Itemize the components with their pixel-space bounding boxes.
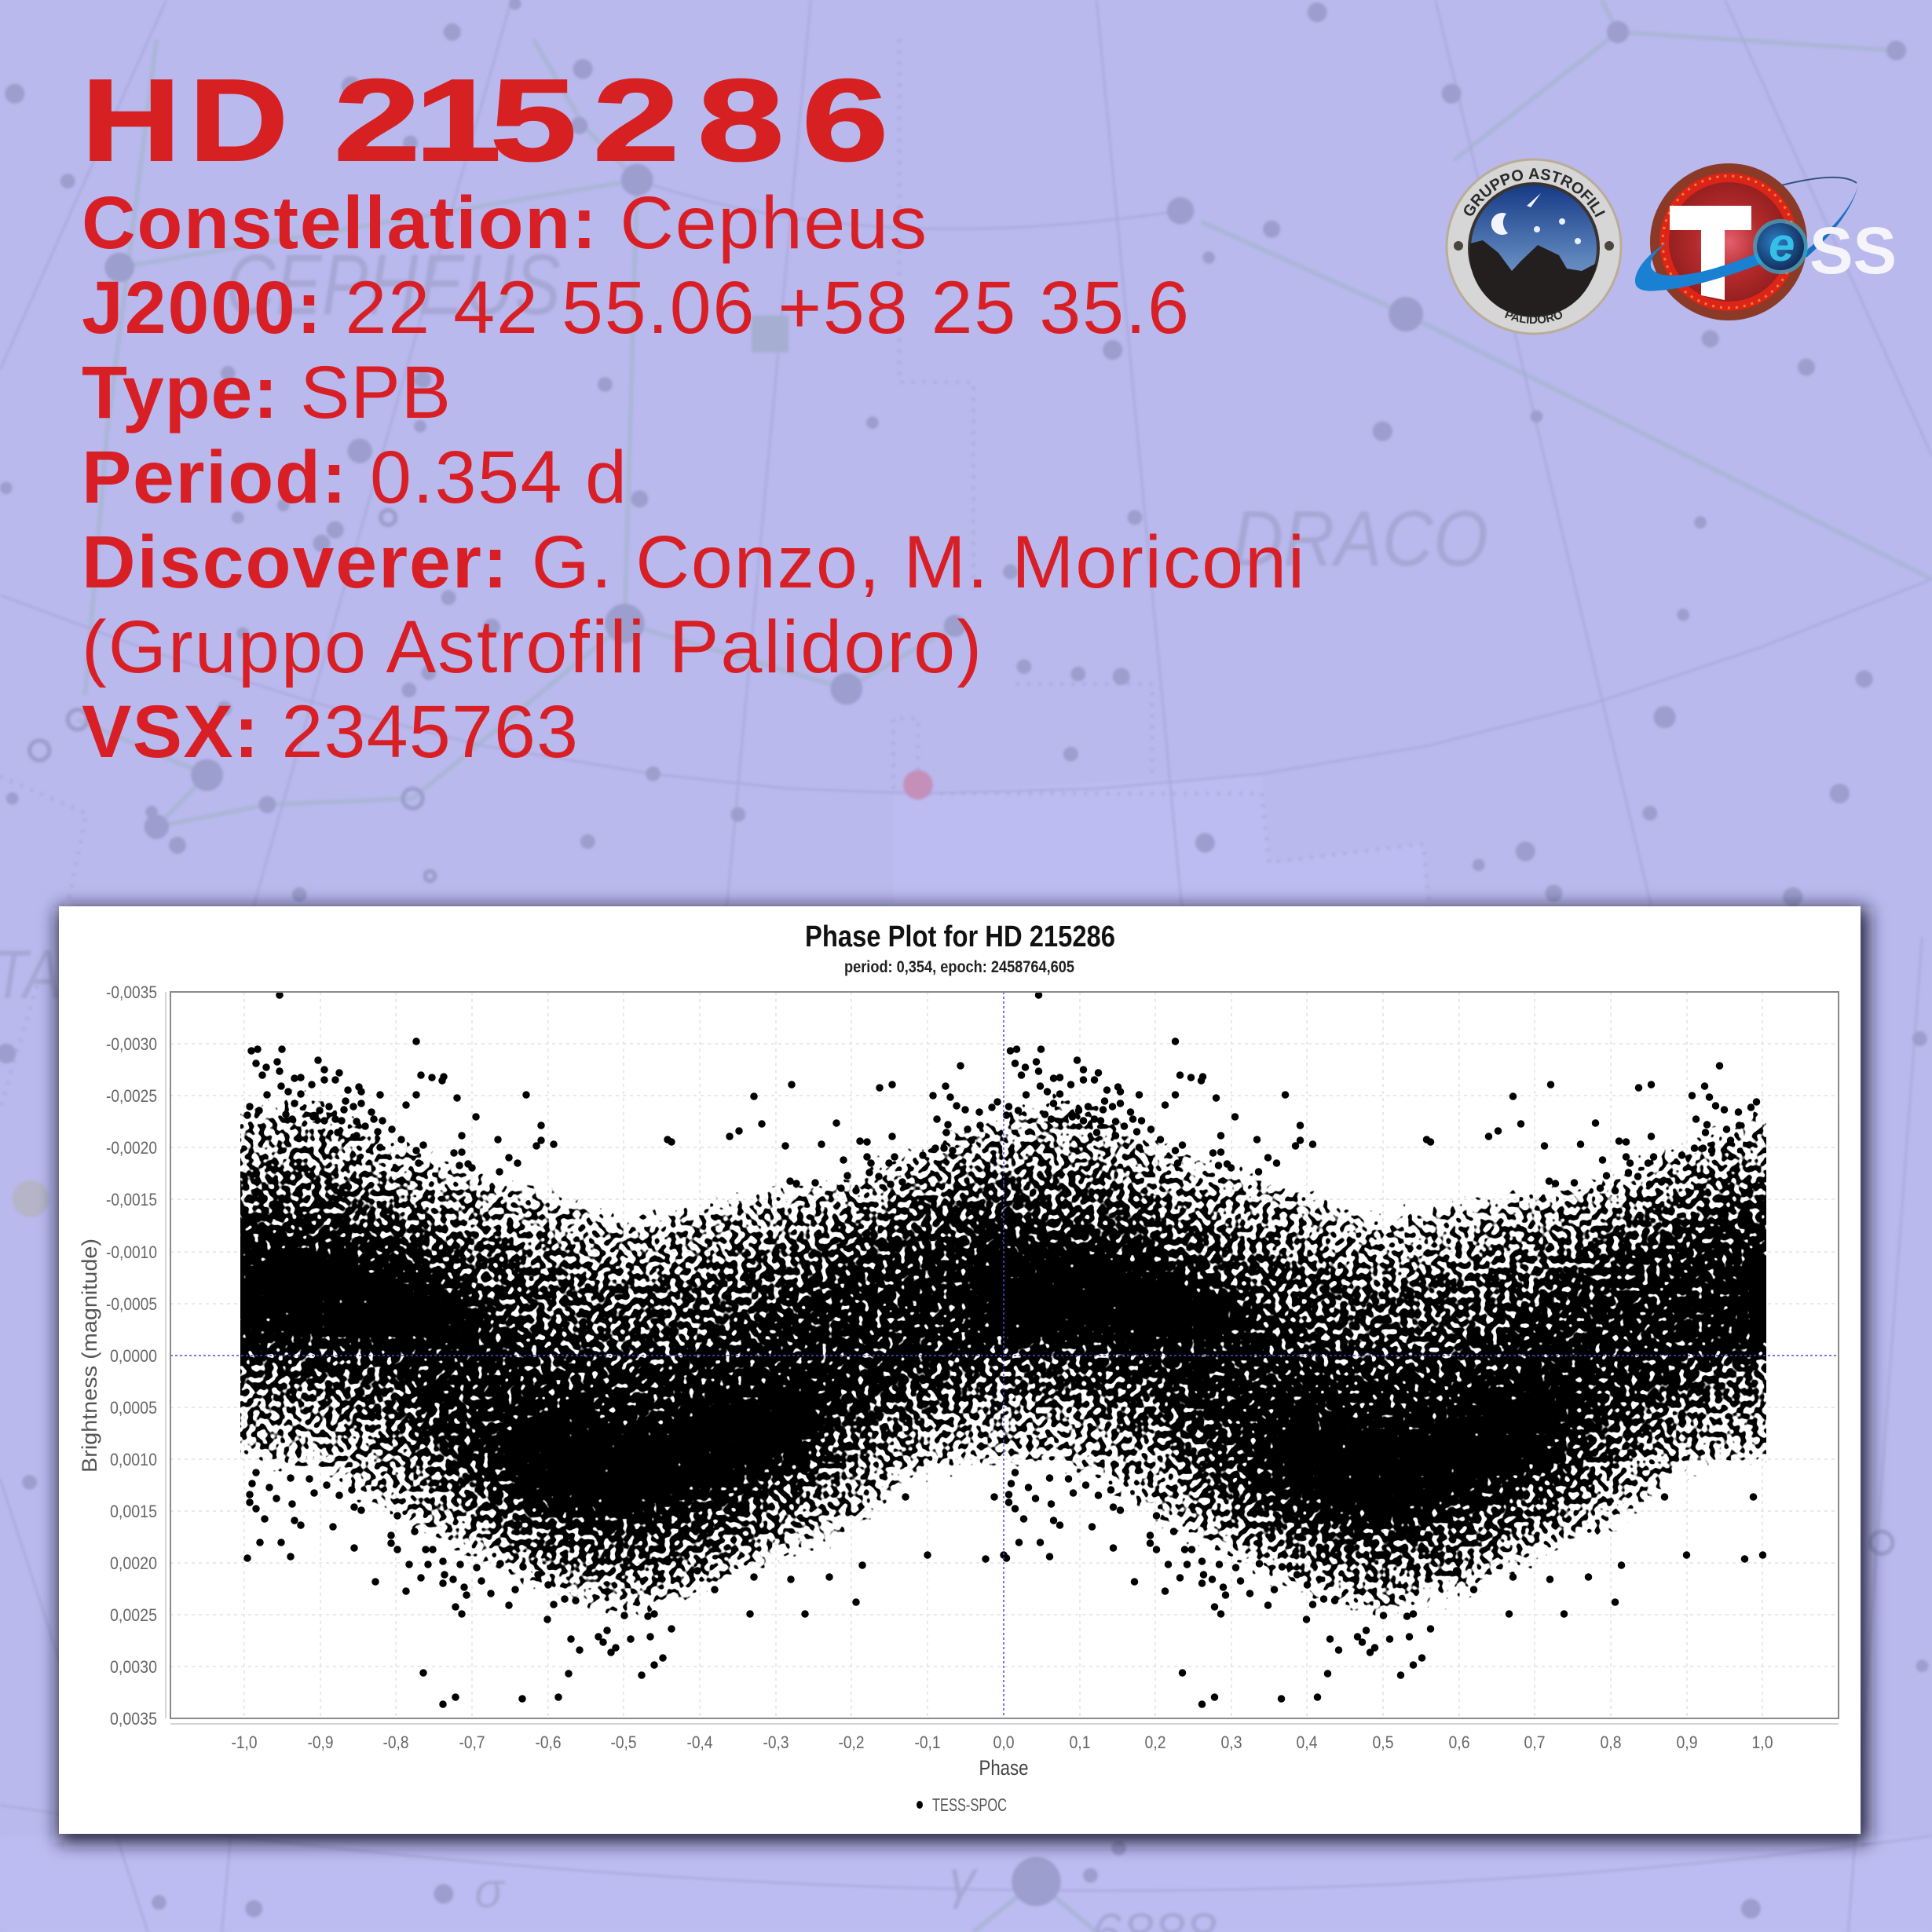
logo: TESS mission: SS	[1809, 214, 1897, 287]
x axis tick labels: -1,0	[231, 1733, 258, 1752]
y axis tick labels: 0,0035	[110, 1709, 157, 1729]
x axis tick labels: -0,3	[763, 1733, 789, 1752]
star chart background: CEPHEUS	[225, 237, 561, 333]
logo: TESS mission	[1635, 163, 1897, 320]
x axis tick labels: 0,0	[993, 1733, 1015, 1752]
panel shadow	[58, 908, 1868, 1842]
y axis tick labels: -0,0010	[106, 1242, 157, 1262]
y axis tick labels: -0,0025	[106, 1086, 157, 1106]
y axis tick labels: 0,0020	[110, 1553, 157, 1573]
star chart background: γ	[949, 1849, 979, 1909]
x axis tick labels: -0,9	[308, 1733, 333, 1752]
x axis tick labels: 0,4	[1296, 1733, 1318, 1752]
x axis tick labels: -0,5	[611, 1733, 636, 1752]
y axis tick labels: -0,0005	[106, 1294, 157, 1314]
star chart background: DRACO	[1232, 495, 1488, 583]
discoverer line: Discoverer: G. Conzo, M. Moriconi	[82, 521, 1304, 604]
y axis tick labels: 0,0010	[110, 1450, 157, 1469]
x axis tick labels: -0,4	[686, 1733, 713, 1752]
x axis tick labels: 0,8	[1601, 1733, 1621, 1752]
x axis tick labels: 0,5	[1373, 1733, 1393, 1752]
y axis tick labels: -0,0035	[106, 982, 157, 1002]
constellation line: Constellation: Cepheus	[82, 181, 927, 265]
y axis tick labels: 0,0000	[110, 1346, 157, 1366]
x axis tick labels: 0,6	[1448, 1733, 1470, 1752]
x axis tick labels: 0,1	[1070, 1733, 1090, 1752]
star chart background: σ	[474, 1864, 506, 1919]
chart title: Phase Plot for HD 215286	[805, 920, 1115, 953]
y axis title: Brightness (magnitude)	[78, 1239, 101, 1473]
logo: TESS mission: e	[1769, 218, 1795, 271]
x axis tick labels: -0,1	[914, 1733, 941, 1752]
crosshair lines	[170, 992, 1839, 1718]
x axis tick labels: 1,0	[1751, 1733, 1773, 1752]
chart subtitle: period: 0,354, epoch: 2458764,605	[844, 958, 1074, 976]
legend	[917, 1795, 1007, 1815]
VSX line: VSX: 2345763	[82, 690, 578, 774]
star data text block	[82, 181, 1304, 774]
y axis tick labels: -0,0030	[106, 1034, 157, 1054]
x axis tick labels: 0,2	[1145, 1733, 1165, 1752]
y axis tick labels: 0,0025	[110, 1605, 157, 1625]
x axis tick labels: -0,8	[383, 1733, 408, 1752]
y axis tick labels: -0,0015	[106, 1190, 157, 1209]
logo: Gruppo Astrofili Palidoro badge: PALIDORO	[1505, 310, 1563, 324]
logo: Gruppo Astrofili Palidoro badge	[1445, 159, 1623, 335]
legend: TESS-SPOC	[932, 1795, 1007, 1815]
title	[82, 56, 888, 185]
plot frame and axes	[166, 992, 1839, 1724]
x axis title: Phase	[979, 1756, 1029, 1780]
x axis tick labels: 0,3	[1220, 1733, 1242, 1752]
panel: phase plot	[0, 906, 1932, 1834]
scatter plot: phase-folded brightness points	[240, 993, 1766, 1708]
title: 215286	[334, 56, 888, 185]
x axis tick labels	[231, 1733, 1773, 1752]
y axis tick labels	[106, 982, 157, 1729]
x axis tick labels: -0,6	[536, 1733, 561, 1752]
coordinates line: J2000: 22 42 55.06 +58 25 35.6	[82, 266, 1189, 349]
x axis tick labels: -0,7	[459, 1733, 485, 1752]
y axis tick labels: 0,0005	[110, 1398, 157, 1418]
y axis tick labels: 0,0030	[110, 1657, 157, 1677]
y axis tick labels: -0,0020	[106, 1138, 157, 1158]
y axis tick labels: 0,0015	[110, 1502, 157, 1521]
x axis tick labels: 0,9	[1676, 1733, 1698, 1752]
title: HD	[82, 56, 288, 185]
discoverer affiliation line: (Gruppo Astrofili Palidoro)	[82, 606, 982, 689]
period line: Period: 0.354 d	[82, 436, 627, 519]
x axis tick labels: 0,7	[1524, 1733, 1546, 1752]
x axis tick labels: -0,2	[839, 1733, 864, 1752]
logo: Gruppo Astrofili Palidoro badge: GRUPPO ASTROFILI	[1464, 168, 1605, 218]
type line: Type: SPB	[82, 351, 451, 434]
